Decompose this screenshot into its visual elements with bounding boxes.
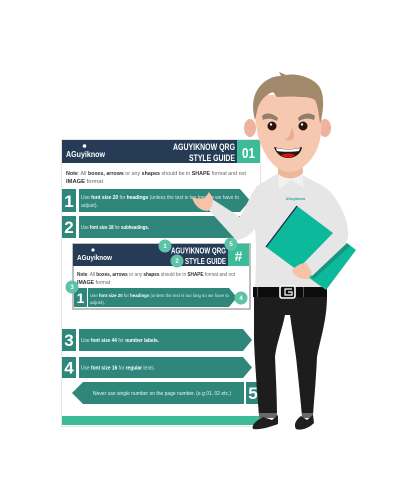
row 3: [62, 329, 252, 351]
ears: [244, 119, 256, 137]
footer bar: [62, 416, 260, 425]
mouth: [274, 147, 302, 158]
inset: style guide example: Note: All boxes, arrows or any shapes should be in SHAPE format and not: [77, 272, 235, 278]
face: [255, 95, 322, 172]
row 2: 2: [64, 218, 74, 237]
inset: style guide example: [66, 238, 250, 309]
inset: style guide example: AGUYIKNOW QRG: [171, 246, 226, 256]
row 4: Use font size 16 for regular texts.: [81, 366, 155, 372]
inset: style guide example: 1: [77, 290, 85, 306]
inset: style guide example: STYLE GUIDE: [185, 256, 226, 266]
inset: style guide example: AGuyiknow: [77, 255, 112, 262]
row 5: [72, 382, 260, 404]
sleeve: [296, 222, 347, 276]
callout badges: 2: [175, 259, 179, 265]
row 3: Use font size 44 for number labels.: [81, 338, 160, 344]
inset: style guide example: #: [235, 248, 243, 264]
row 1: adjust).: [81, 203, 98, 209]
folder front: [266, 206, 333, 270]
row 5: 5: [248, 384, 258, 403]
neck: [278, 158, 303, 178]
shirt: [207, 172, 348, 287]
panel: style guide document: IMAGE format: [66, 179, 103, 185]
socks: [259, 413, 313, 418]
eyes: [268, 122, 276, 130]
character: man with folder: [192, 72, 356, 430]
callout badges: [66, 238, 248, 304]
hair: [253, 72, 323, 124]
callout badges: 4: [239, 296, 243, 302]
callout badges: 5: [229, 242, 233, 248]
note text: Note: All boxes, arrows or any shapes should be in SHAPE format and not: [66, 171, 246, 177]
row 2: [62, 216, 250, 238]
belt: [253, 286, 327, 298]
panel: style guide document: [62, 140, 260, 426]
row 3: 3: [64, 331, 74, 350]
eyebrows: [262, 114, 315, 121]
pointing hand: [192, 192, 213, 211]
row 1: Use font size 20 for headings (unless the text is too long so we have to: [81, 195, 239, 201]
row 5: Never use single number on the page number. (e.g 01, 02 etc.): [93, 391, 231, 397]
row 4: [62, 357, 252, 378]
holding hand: [292, 263, 312, 279]
row 1: [62, 189, 250, 212]
inset: style guide example: Use font size 20 for headings (unless the text is too long so we have to: [90, 293, 229, 298]
trousers: [254, 296, 327, 416]
row 1: 1: [64, 192, 74, 211]
nose: [285, 127, 294, 140]
document header bar: STYLE GUIDE: [189, 153, 235, 164]
shirt logo: AGuyiknow: [286, 197, 305, 201]
document header bar: AGUYIKNOW QRG: [173, 142, 235, 153]
callout badges: 1: [163, 244, 167, 250]
document header bar: 01: [242, 145, 255, 162]
callout badges: 3: [70, 285, 74, 291]
row 2: Use font size 18 for subheadings.: [81, 225, 149, 231]
shoes: [253, 415, 314, 430]
folder back: [308, 243, 356, 290]
document header bar: [62, 140, 260, 164]
inset: style guide example: IMAGE format: [77, 280, 111, 286]
document header bar: AGuyiknow: [66, 150, 106, 159]
inset: style guide example: adjust).: [90, 300, 105, 305]
row 4: 4: [64, 358, 74, 378]
